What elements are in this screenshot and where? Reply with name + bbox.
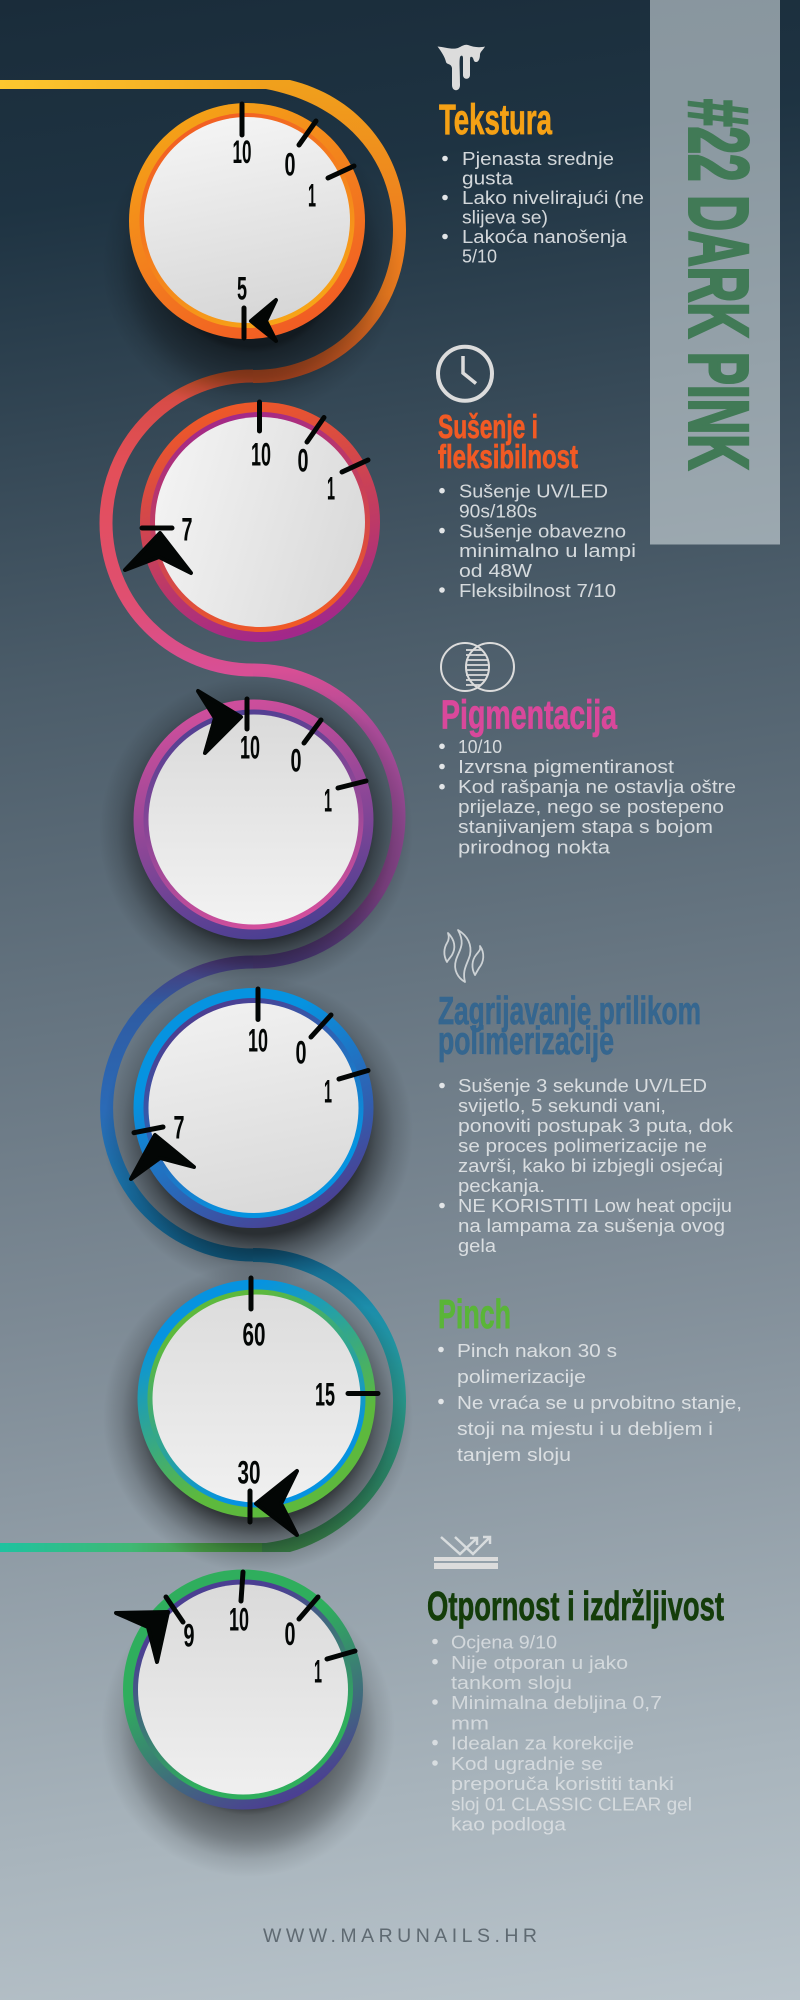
text block: 90s/180s <box>459 500 537 521</box>
text block: Sušenje 3 sekunde UV/LED <box>458 1075 707 1096</box>
dial: heat during curing 7/10 <box>103 977 413 1287</box>
text block: Nije otporan u jako <box>451 1652 628 1673</box>
text block: slijeva se) <box>462 206 548 228</box>
dial: heat during curing 7/10: 7 <box>174 1110 184 1146</box>
icon: reflecting surface <box>434 1537 498 1569</box>
section: Pigmentacija <box>439 643 736 858</box>
dial: pinch 30 s: 15 <box>315 1376 335 1412</box>
dial: pinch 30 s <box>103 1263 413 1573</box>
text block: Fleksibilnost 7/10 <box>459 580 616 601</box>
dial: resistance and durability 9/10: 0 <box>284 1616 296 1652</box>
text block: Sušenje UV/LED <box>459 480 608 502</box>
dial: resistance and durability 9/10: 10 <box>229 1602 249 1638</box>
text block: kao podloga <box>451 1814 567 1835</box>
icon: overlapping circles <box>441 643 514 691</box>
text block: prijelaze, nego se postepeno <box>458 796 724 817</box>
dial: pigmentation 10/10 <box>99 676 413 990</box>
dial: pigmentation 10/10: 0 <box>290 742 302 778</box>
pointer arrow <box>251 300 276 341</box>
text block: prirodnog nokta <box>458 836 611 858</box>
text block: Ne vraća se u prvobitno stanje, <box>457 1392 742 1413</box>
text block: Kod rašpanja ne ostavlja oštre <box>458 776 736 797</box>
text block: minimalno u lampi <box>459 540 636 561</box>
text block: gela <box>458 1235 497 1256</box>
text block: stoji na mjestu i u debljem i <box>457 1418 713 1439</box>
text block <box>439 736 736 858</box>
icon: dripping paint <box>438 45 485 90</box>
pointer arrow <box>116 1612 168 1662</box>
text block: tanjem sloju <box>457 1444 571 1465</box>
text block: Lakoća nanošenja <box>462 226 628 247</box>
section: Sušenje i fleksibilnost <box>438 347 636 601</box>
text block: 5/10 <box>462 246 497 266</box>
text block: tankom sloju <box>451 1672 572 1693</box>
heading: Tekstura <box>439 96 553 144</box>
heading: polimerizacije <box>438 1020 614 1063</box>
heading: fleksibilnost <box>438 438 578 475</box>
dial: heat during curing 7/10: 10 <box>248 1022 268 1058</box>
pointer arrow <box>256 1471 297 1535</box>
banner title: #22 DARK PINK <box>672 99 766 470</box>
dial: texture 5/10: 0 <box>284 146 296 182</box>
text block: stanjivanjem stapa s bojom <box>458 816 713 837</box>
dial: drying and flexibility 7/10 <box>125 402 380 642</box>
text block: Kod ugradnje se <box>451 1753 603 1774</box>
heading: Pigmentacija <box>441 692 618 738</box>
section: Otpornost i izdržljivost <box>427 1537 724 1835</box>
text block: Ocjena 9/10 <box>451 1632 557 1653</box>
heading <box>438 990 701 1063</box>
dial: resistance and durability 9/10: 1 <box>314 1654 322 1690</box>
text block: 10/10 <box>458 736 502 757</box>
dial: resistance and durability 9/10: 9 <box>184 1618 194 1654</box>
heading: Pinch <box>438 1291 511 1337</box>
dial: texture 5/10: 5 <box>237 270 247 306</box>
text block: se proces polimerizacije ne <box>458 1135 707 1156</box>
dial: pinch 30 s: 30 <box>238 1454 260 1490</box>
footer website: WWW.MARUNAILS.HR <box>263 1925 537 1947</box>
dial: drying and flexibility 7/10: 7 <box>182 512 192 548</box>
text block: Pjenasta srednje <box>462 148 614 169</box>
text block: svijetlo, 5 sekundi vani, <box>458 1095 666 1116</box>
text block: preporuča koristiti tanki <box>451 1773 674 1794</box>
dial: drying and flexibility 7/10: 10 <box>251 436 271 472</box>
dial: texture 5/10: 10 <box>232 134 252 170</box>
text block: Sušenje obavezno <box>459 520 626 541</box>
text block <box>439 1075 734 1256</box>
text block <box>439 480 636 601</box>
text block: Minimalna debljina 0,7 <box>451 1692 662 1713</box>
section: Tekstura <box>438 45 644 267</box>
text block: od 48W <box>459 560 533 581</box>
text block: NE KORISTITI Low heat opciju <box>458 1195 732 1216</box>
section: Pinch <box>438 1291 742 1465</box>
text block: mm <box>451 1712 489 1734</box>
section: Zagrijavanje prilikom polimerizacije <box>438 930 734 1256</box>
pointer arrow <box>198 691 241 753</box>
dial: pigmentation 10/10: 10 <box>240 730 260 766</box>
pointer arrow <box>131 1135 194 1179</box>
text block: ponoviti postupak 3 puta, dok <box>458 1115 734 1136</box>
text block: polimerizacije <box>457 1366 586 1387</box>
text block <box>438 1340 742 1465</box>
text block: sloj 01 CLASSIC CLEAR gel <box>451 1793 692 1814</box>
text block: Izvrsna pigmentiranost <box>458 756 674 777</box>
icon: heat waves <box>444 930 483 982</box>
text block: Idealan za korekcije <box>451 1733 634 1754</box>
heading: Sušenje i <box>438 408 538 445</box>
heading <box>438 408 578 475</box>
text block <box>432 1632 692 1835</box>
dial: heat during curing 7/10: 0 <box>296 1034 306 1070</box>
pointer arrow <box>125 533 191 573</box>
dial: drying and flexibility 7/10: 0 <box>298 442 308 478</box>
dial: heat during curing 7/10: 1 <box>324 1074 332 1110</box>
text block: peckanja. <box>458 1175 545 1196</box>
panel: product name banner <box>650 0 780 544</box>
dial: pinch 30 s: 60 <box>242 1316 266 1352</box>
text block: na lampama za sušenja ovog <box>458 1215 725 1236</box>
dial: texture 5/10 <box>102 103 402 416</box>
text block: gusta <box>462 168 514 188</box>
text block: Pinch nakon 30 s <box>457 1340 617 1361</box>
dial: resistance and durability 9/10 <box>101 1570 395 1877</box>
ribbon: winding line behind the dials <box>0 80 406 1552</box>
text block: Lako nivelirajući (ne <box>462 187 644 208</box>
dial: pigmentation 10/10: 1 <box>324 782 332 818</box>
text block <box>442 148 644 266</box>
dial: texture 5/10: 1 <box>308 178 316 214</box>
icon: clock <box>438 347 492 401</box>
text block: završi, kako bi izbjegli osjećaj <box>458 1155 723 1176</box>
dial: drying and flexibility 7/10: 1 <box>327 470 335 506</box>
